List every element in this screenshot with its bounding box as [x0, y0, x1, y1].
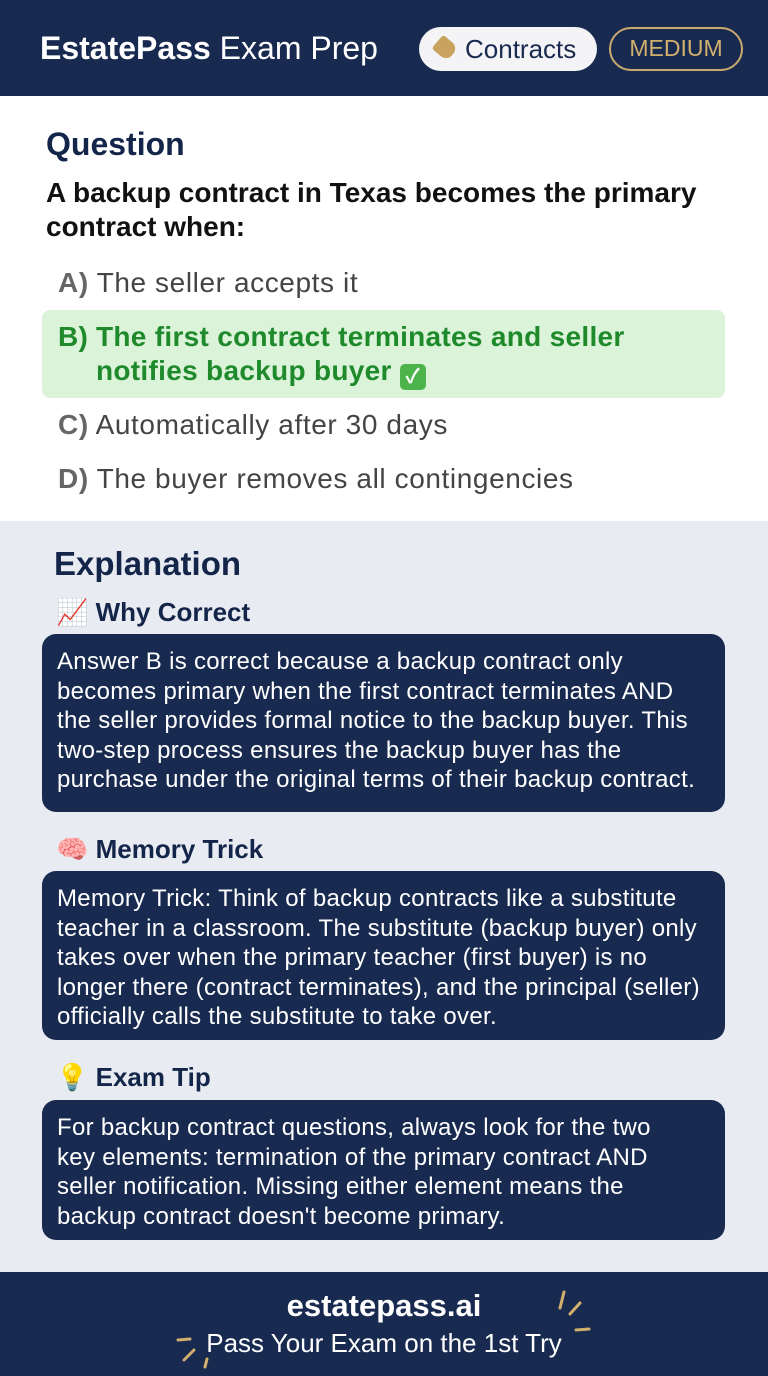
option B correct: The first contract terminates and seller	[96, 321, 625, 352]
tag: MEDIUM: MEDIUM	[629, 35, 723, 61]
heading: memory trick: 🧠 Memory Trick	[56, 834, 263, 864]
heading: exam tip: 💡 Exam Tip	[56, 1062, 211, 1092]
box: memory trick: Memory Trick: Think of backup contracts like a substitute teacher in a classroom. The substitute (backup buyer) only takes over when the primary teacher (first buyer) is no longer there (contract terminates), and the principal (seller) officially calls the substitute to take over.	[57, 885, 700, 1030]
question panel	[0, 96, 768, 521]
option A: A) The seller accepts it	[58, 267, 358, 298]
option B correct: ✓	[405, 366, 420, 388]
explanation heading: Explanation	[54, 545, 241, 582]
sparkle decorations	[176, 1290, 590, 1368]
tag: Contracts	[419, 27, 597, 71]
brand title: EstatePass Exam Prep	[40, 30, 378, 66]
option B correct: B)	[58, 321, 88, 352]
box: why correct: Answer B is correct because a backup contract only becomes primary when the first contract terminates AND the seller provides formal notice to the backup buyer. This two-step process ensures the backup buyer has the purchase under the original terms of their backup contract.	[57, 648, 695, 793]
option B correct	[42, 310, 725, 398]
footer tagline: Pass Your Exam on the 1st Try	[206, 1328, 562, 1358]
box: exam tip: For backup contract questions, always look for the two key elements: termination of the primary contract AND seller notification. Missing either element means the backup contract doesn't become primary.	[57, 1114, 651, 1230]
footer site name: estatepass.ai	[287, 1288, 481, 1323]
tag: MEDIUM	[609, 27, 743, 71]
option B correct: notifies backup buyer	[96, 355, 392, 386]
tag: Contracts: Contracts	[465, 34, 576, 64]
question text: A backup contract in Texas becomes the primary contract when:	[46, 177, 696, 242]
question heading: Question	[46, 126, 185, 162]
heading: why correct: 📈 Why Correct	[56, 597, 250, 627]
header bar	[0, 0, 768, 96]
option C: C) Automatically after 30 days	[58, 409, 448, 440]
option D: D) The buyer removes all contingencies	[58, 463, 574, 494]
footer	[0, 1272, 768, 1376]
